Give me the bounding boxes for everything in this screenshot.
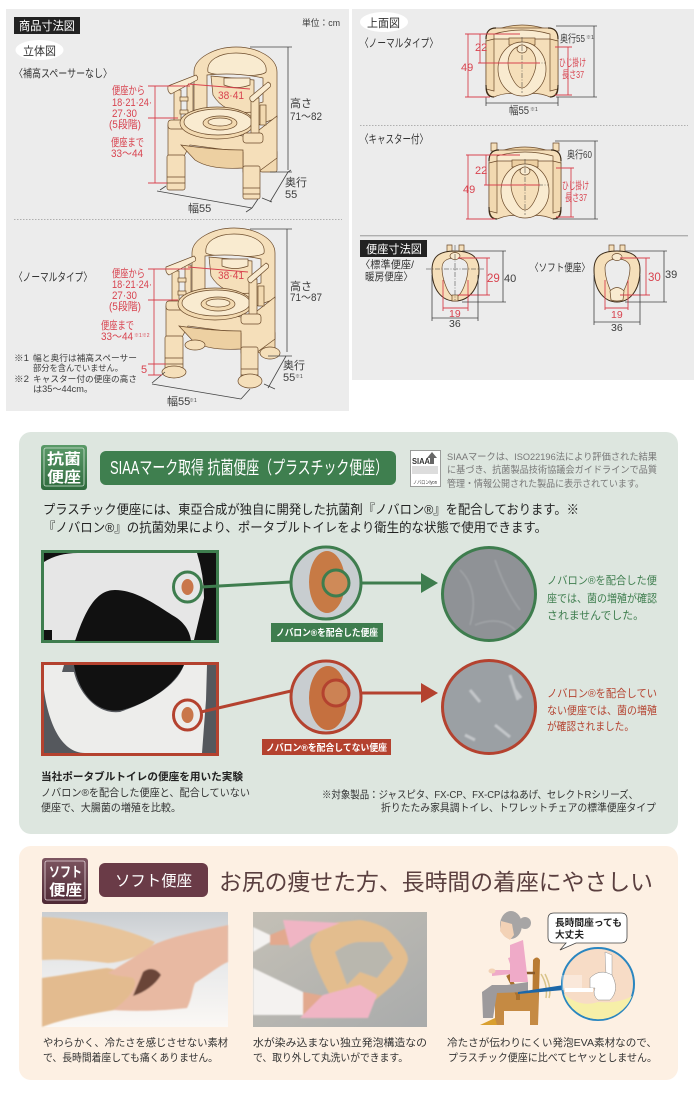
footnotes: 部分を含んでいません。 [33,363,123,373]
label: soft seat: 〈ソフト便座〉 [530,261,590,274]
dimensions: top view normal: ひじ掛け [559,56,586,69]
heading bar: SIAA mark [100,451,396,485]
panel: antibacterial seat [19,432,678,834]
height text: 71〜82 [290,111,322,123]
badge: perspective view [16,40,64,60]
dimensions: normal type [101,229,322,408]
label: normal type: 〈ノーマルタイプ〉 [14,271,92,284]
heading: seat dimensions: 便座寸法図 [366,242,422,256]
red dimension text: 27·30 [112,108,137,120]
red dimension text: (5段階) [109,299,141,313]
dimensions: soft seat: 36 [611,322,623,334]
icon badge: antibacterial seat [41,445,87,490]
callout: 大丈夫 [555,929,584,941]
dimensions: top view normal [461,26,597,117]
dimensions: standard seat: 40 [504,273,516,285]
width text: ※1 [189,398,197,404]
dimensions: standard seat [432,251,516,330]
target products note: 折りたたみ家具調トイレ、トワレットチェアの標準便座タイプ [381,801,656,814]
heading: gentle on long sitting: お尻の痩せた方、長時間の着座にやさしい [219,869,653,895]
red dimension text: 27·30 [112,290,137,302]
magnifier connector [518,985,564,994]
callout: 長時間座っても [555,917,622,929]
magnified seat: green [291,547,361,619]
dimensions: standard seat: 19 [449,308,461,320]
footnotes: 幅と奥行は補高スペーサー [33,352,137,363]
photo: seat with Novalon [42,552,218,642]
dimensions: top view normal: ※1 [530,107,538,113]
chair normal type [162,228,280,388]
top view caster [489,143,561,219]
illustration: seated woman with callout [480,911,634,1025]
caption: EVA material: プラスチック便座に比べてヒヤッとしません。 [448,1051,657,1064]
caption: washable: で、取り外して丸洗いができます。 [253,1051,408,1064]
heading: seat dimensions [360,240,427,257]
magnified pelvis [562,948,634,1020]
dimensions: soft seat: 19 [611,309,623,321]
caption: EVA material [447,1036,657,1064]
red dimension text: 33〜44 [101,331,133,343]
depth text: 55 [283,372,295,384]
depth text [283,358,305,384]
experiment description: 便座で、大腸菌の増殖を比較。 [41,801,181,814]
result text: green [547,574,657,622]
icon badge: antibacterial seat: 便座 [47,468,81,486]
result text: green: されませんでした。 [547,609,644,622]
footnotes: ※1 [14,353,29,363]
caption: soft material: で、長時間着座しても痛くありません。 [43,1051,218,1064]
result text: red: ノバロン®を配合してい [547,687,657,700]
height text [290,279,322,304]
SIAA logo: ノバロンlyon [413,480,437,486]
dimensions: top view normal: 49 [461,62,473,74]
arrow: red [421,683,438,703]
tag: with Novalon [271,623,383,642]
result text: green: ノバロン®を配合した便 [547,574,657,587]
tag: without Novalon [262,739,391,755]
SIAA explanation [447,451,657,490]
intro text: プラスチック便座には、東亞合成が独自に開発した抗菌剤『ノバロン®』を配合しております。※ [43,502,579,517]
woman illustration [480,911,531,1025]
dimensions: top view normal: 奥行55 [560,32,585,45]
badge: perspective view: 立体図 [23,44,56,58]
armrest width text: 38·41 [218,270,244,282]
dimensions: standard seat: 29 [487,273,500,285]
armrest width text: 38·41 [218,90,244,102]
footnotes: ※2 [14,374,29,384]
badge: top view [360,12,408,32]
red dimension text: 便座から [112,267,145,280]
sample spot [174,572,202,602]
depth text: 55 [285,189,297,201]
photo: washing seat [253,912,427,1027]
connector line: green [201,582,424,587]
heading: product dimensions: 商品寸法図 [19,19,75,33]
intro text [43,502,579,535]
footnotes: は35〜44cm。 [33,384,93,394]
SIAA logo [410,450,440,486]
photo: hand pressing cushion [42,912,228,1027]
photo: seat without Novalon [42,664,218,754]
dimensions: standard seat: 36 [449,318,461,330]
label: standard seat [360,258,414,283]
heading bar: soft seat [99,863,208,897]
result text: green: 座では、菌の増殖が確認 [547,591,657,605]
red dimension text: 18·21·24· [112,97,152,109]
label: normal type: 〈ノーマルタイプ〉 [360,37,438,50]
experiment description [41,770,250,814]
dimensions: top view caster [463,141,598,219]
caption: soft material [43,1036,228,1064]
intro text: 『ノバロン®』の抗菌効果により、ポータブルトイレをより衛生的な状態で使用できます。 [43,520,547,535]
dimensions: top view caster: 49 [463,184,475,196]
experiment description: ノバロン®を配合した便座と、配合していない [41,786,250,799]
top view normal [486,25,558,97]
dimensions: top view caster: 長さ37 [565,192,587,204]
SIAA explanation: 管理・情報公開された製品に表示されています。 [447,478,644,490]
chair without spacer [167,47,277,199]
arrow: green [421,573,438,593]
target products note [322,788,656,814]
dimensions: top view caster: 22 [475,165,487,177]
SIAA logo: SIAA [412,457,430,466]
result text: red [547,687,657,733]
depth text [285,175,307,201]
microscope image: red [442,660,536,754]
dimensions: top view normal: 22 [475,42,487,54]
dimensions: soft seat [594,251,677,334]
red dimension text: 便座まで [101,319,134,332]
target products note: ※対象製品：ジャスピタ、FX-CP、FX-CPはねあげ、セレクトRシリーズ、 [322,788,638,801]
icon badge: soft seat: 便座 [49,881,82,899]
caption: EVA material: 冷たさが伝わりにくい発泡EVA素材なので、 [447,1036,657,1049]
dimensions: top view normal: 長さ37 [562,69,584,81]
footnotes: キャスター付の便座の高さ [33,373,137,384]
width text: 幅55 [167,395,190,408]
dimensions: top view normal: 幅55 [509,104,529,117]
width text: 幅55 [188,202,211,215]
red dimension text [101,267,152,376]
standard seat [426,245,484,301]
unit label: 単位：cm [302,17,340,28]
SIAA explanation: に基づき、抗菌製品技術協議会ガイドラインで品質 [447,464,657,476]
red dimension text: 便座まで [111,136,144,149]
microscope image: green [442,548,536,640]
tag: with Novalon: ノバロン®を配合した便座 [276,627,378,639]
panel: product dimensions [6,9,349,411]
dimensions: top view caster: ひじ掛け [562,179,589,192]
sample spot [174,700,202,730]
dimensions: chair without spacer [109,47,322,215]
caption: washable: 水が染み込まない独立発泡構造なの [253,1036,427,1049]
depth text: 奥行 [283,358,305,372]
heading bar: soft seat: ソフト便座 [115,872,192,890]
red dimension text [109,84,152,160]
panel: soft seat [19,846,678,1080]
connector line: red [201,691,424,712]
tag: without Novalon: ノバロン®を配合してない便座 [266,742,387,754]
red dimension text: 便座から [112,84,145,97]
label: no spacer: 〈補高スペーサーなし〉 [14,66,112,80]
red dimension text: 5 [141,364,147,376]
icon badge: antibacterial seat: 抗菌 [47,450,81,468]
icon badge: soft seat: ソフト [49,864,82,880]
red dimension text: 33〜44 [111,148,143,160]
soft seat [594,245,640,302]
red dimension text: 18·21·24· [112,279,152,291]
height text [290,96,322,123]
chair illustration [495,958,550,1025]
result text: red: が確認されました。 [547,719,634,733]
caption: washable [253,1036,427,1064]
dimensions: soft seat: 30 [648,272,661,284]
panel: top views and seat dimensions [352,9,694,380]
result text: red: ない便座では、菌の増殖 [547,704,657,717]
height text: 高さ [290,279,312,293]
heading bar: SIAA mark: SIAAマーク取得 抗菌便座（プラスチック便座） [110,458,388,478]
dimensions: top view caster: 奥行60 [567,148,592,161]
icon badge: soft seat [42,858,88,904]
label: standard seat: 暖房便座〉 [365,270,413,283]
red dimension text: (5段階) [109,117,141,131]
footnotes [14,352,137,394]
label: caster type: 〈キャスター付〉 [360,133,428,146]
depth text: 奥行 [285,175,307,189]
label: standard seat: 〈標準便座/ [360,258,414,271]
SIAA explanation: SIAAマークは、ISO22196法により評価された結果 [447,451,657,463]
callout [548,913,627,950]
caption: soft material: やわらかく、冷たさを感じさせない素材 [43,1036,228,1049]
experiment description: 当社ポータブルトイレの便座を用いた実験 [41,770,244,783]
dimensions: soft seat: 39 [665,269,677,281]
height text: 高さ [290,96,312,110]
dimensions: top view normal: ※1 [586,35,594,41]
magnified seat: red [291,661,361,733]
badge: top view: 上面図 [367,17,400,30]
height text: 71〜87 [290,292,322,304]
depth text: ※1 [295,374,303,380]
red dimension text: ※1※2 [134,333,150,339]
